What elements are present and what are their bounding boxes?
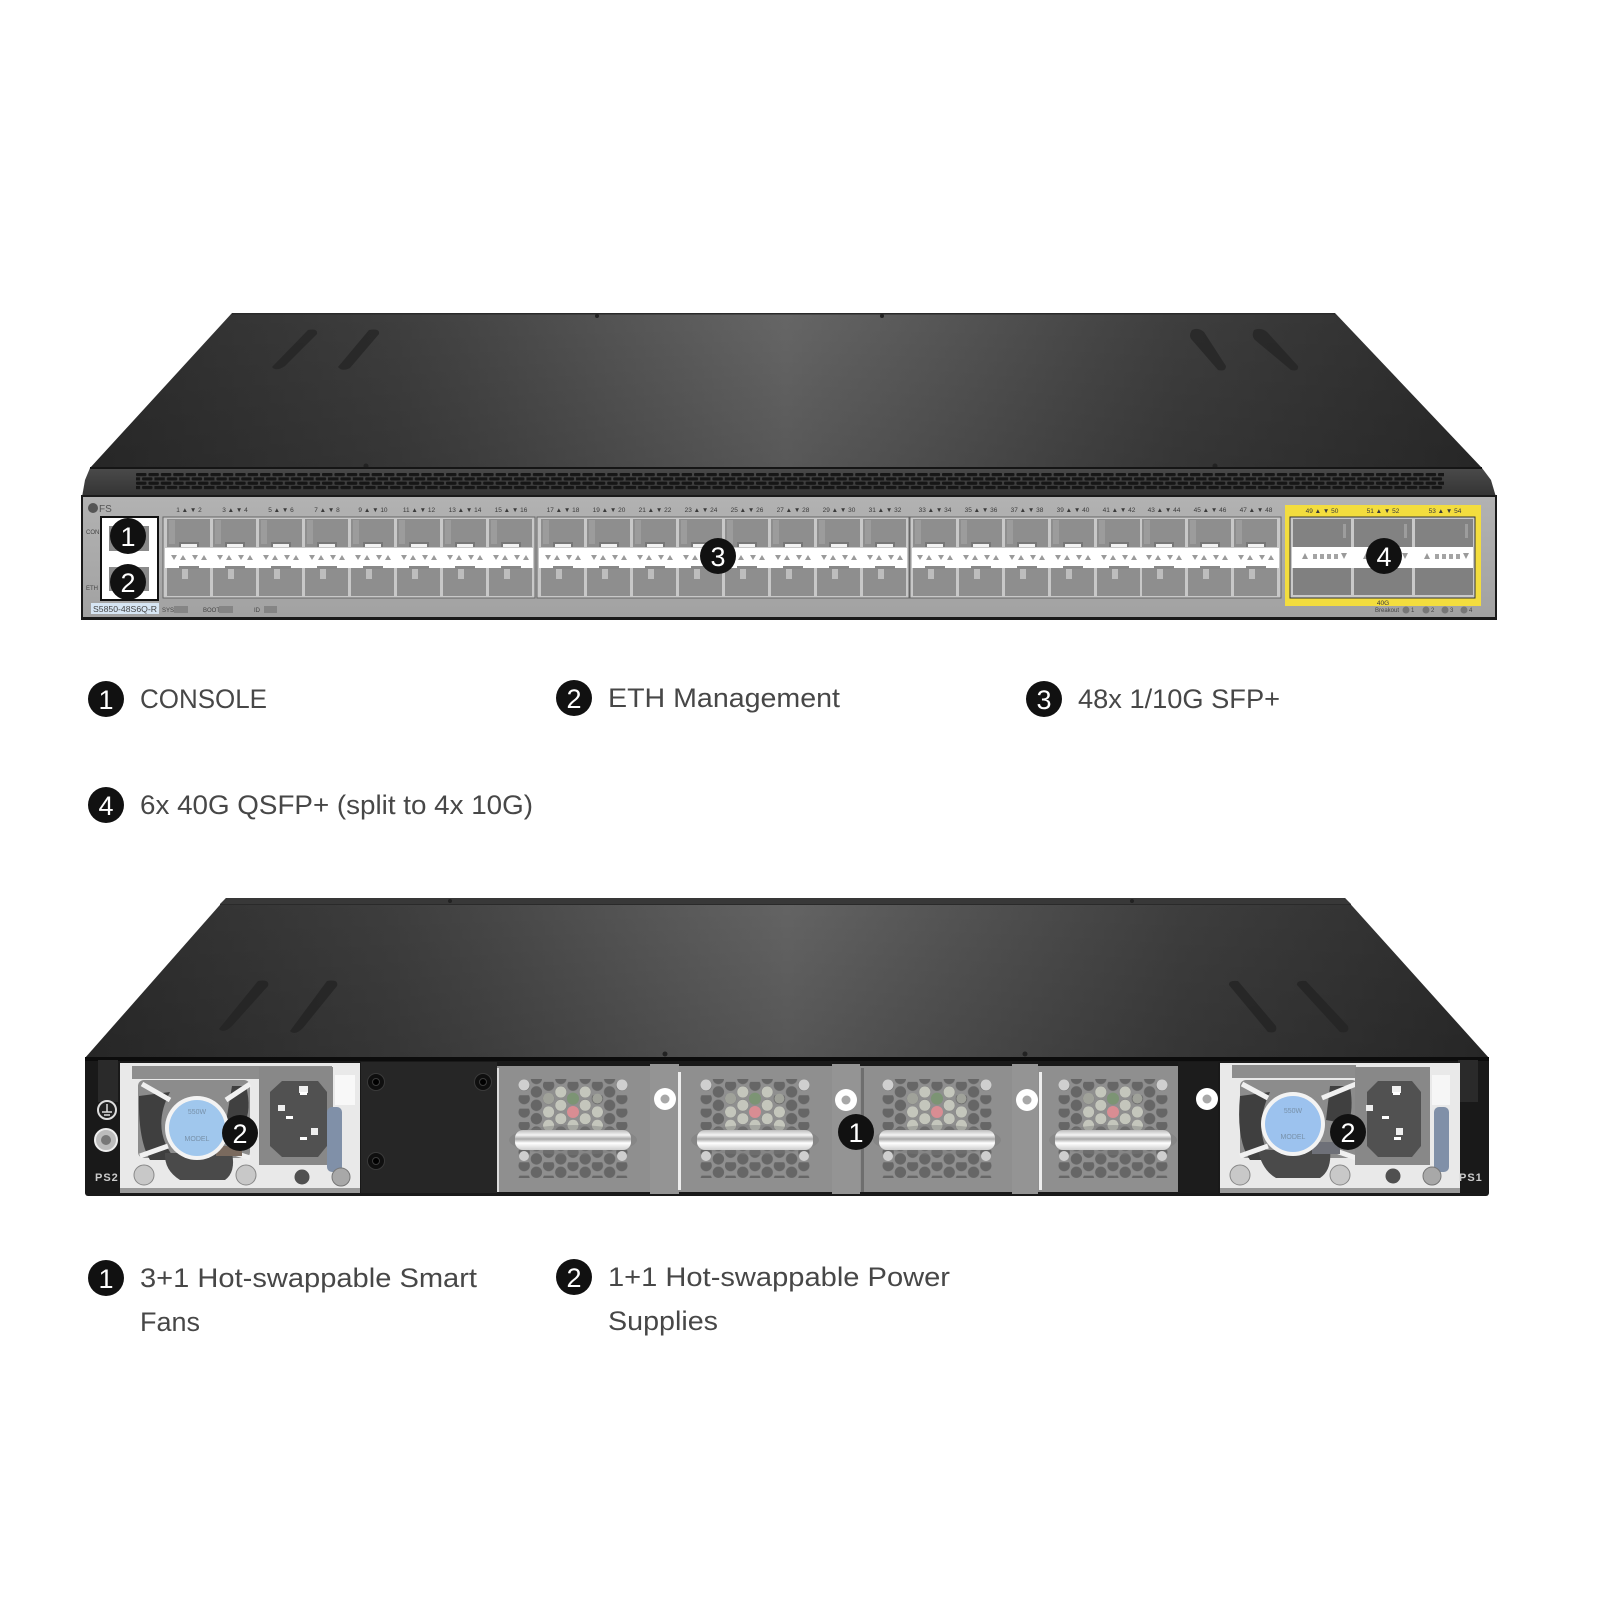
- model label and status LEDs: ID: [254, 608, 261, 614]
- legend item 4 QSFP+: 4: [98, 791, 114, 821]
- legend item 1 CONSOLE: [88, 681, 267, 717]
- power supply 2 (left): 550W: [188, 1109, 207, 1116]
- legend item 2 power supplies: 2: [566, 1263, 582, 1293]
- ground symbols: [95, 1101, 117, 1151]
- panel: front view of switch: [81, 313, 1497, 620]
- breakout LED legend: Breakout: [1375, 608, 1399, 614]
- SFP+ port number labels: 7 ▲ ▼ 8: [314, 507, 340, 514]
- power supply 2 (left): MODEL: [185, 1136, 210, 1143]
- SFP+ port number labels: [176, 507, 1273, 514]
- QSFP+ ports with yellow highlight: 40G: [1377, 600, 1389, 607]
- legend: front ports: [88, 680, 1280, 823]
- callout 2: left power supply: 2: [232, 1119, 248, 1149]
- legend item 2 power supplies: [556, 1259, 950, 1336]
- legend item 1 smart fans: 3+1 Hot-swappable Smart: [140, 1263, 478, 1293]
- power supply 1 (right): [1220, 1063, 1460, 1193]
- callout 1: console: 1: [120, 522, 136, 552]
- legend item 1 smart fans: Fans: [140, 1307, 200, 1337]
- QSFP+ ports with yellow highlight: 49 ▲ ▼ 50: [1306, 508, 1339, 515]
- model label and status LEDs: [91, 603, 277, 614]
- model label and status LEDs: BOOT: [203, 608, 220, 614]
- SFP+ ports group 1: [163, 517, 535, 598]
- SFP+ port number labels: 3 ▲ ▼ 4: [222, 507, 248, 514]
- QSFP+ ports with yellow highlight: 53 ▲ ▼ 54: [1429, 508, 1462, 515]
- callout 3: SFP+: [700, 538, 736, 574]
- SFP+ port number labels: 43 ▲ ▼ 44: [1148, 507, 1181, 514]
- callout 1: fans: 1: [848, 1118, 864, 1148]
- SFP+ port number labels: 41 ▲ ▼ 42: [1103, 507, 1136, 514]
- SFP+ port number labels: 27 ▲ ▼ 28: [777, 507, 810, 514]
- SFP+ ports group 2: [537, 517, 909, 598]
- SFP+ port number labels: 31 ▲ ▼ 32: [869, 507, 902, 514]
- SFP+ port number labels: 19 ▲ ▼ 20: [593, 507, 626, 514]
- front bezel with vent holes: [82, 467, 1496, 497]
- callout 1: fans: [838, 1114, 874, 1150]
- QSFP+ ports with yellow highlight: 51 ▲ ▼ 52: [1367, 508, 1400, 515]
- legend item 2 ETH Management: 2: [566, 684, 582, 714]
- callout 1: console: [110, 518, 146, 554]
- callout 2: right power supply: 2: [1340, 1118, 1356, 1148]
- breakout LED legend: 2: [1431, 608, 1435, 614]
- FS logo: FS: [99, 504, 112, 515]
- legend item 3 SFP+: 3: [1036, 685, 1052, 715]
- SFP+ port number labels: 9 ▲ ▼ 10: [358, 507, 388, 514]
- fan modules: [497, 1064, 1178, 1194]
- legend item 2 ETH Management: [556, 680, 841, 716]
- panel: rear view of switch: [85, 898, 1489, 1196]
- legend item 1 CONSOLE: CONSOLE: [140, 684, 267, 714]
- legend item 2 ETH Management: ETH Management: [608, 683, 841, 713]
- legend item 4 QSFP+: 6x 40G QSFP+ (split to 4x 10G): [140, 790, 533, 820]
- power supply 2 (left): [120, 1063, 360, 1193]
- SFP+ port number labels: 15 ▲ ▼ 16: [495, 507, 528, 514]
- QSFP+ ports with yellow highlight: [1285, 505, 1481, 607]
- SFP+ port number labels: 11 ▲ ▼ 12: [403, 507, 436, 514]
- chassis top lid (front): [90, 313, 1482, 468]
- legend item 1 CONSOLE: 1: [98, 685, 114, 715]
- SFP+ ports group 3: [910, 517, 1281, 598]
- callout 2: ETH: 2: [120, 568, 136, 598]
- model label and status LEDs: S5850-48S6Q-R: [93, 604, 157, 614]
- SFP+ port number labels: 13 ▲ ▼ 14: [449, 507, 482, 514]
- console and management port box: CON: [86, 530, 99, 536]
- SFP+ port number labels: 25 ▲ ▼ 26: [731, 507, 764, 514]
- callout 4: QSFP+: 4: [1376, 542, 1392, 572]
- callout 3: SFP+: 3: [710, 542, 726, 572]
- breakout LED legend: 4: [1469, 608, 1473, 614]
- SFP+ port number labels: 37 ▲ ▼ 38: [1011, 507, 1044, 514]
- SFP+ port number labels: 29 ▲ ▼ 30: [823, 507, 856, 514]
- callout 2: right power supply: [1330, 1114, 1366, 1150]
- legend item 2 power supplies: Supplies: [608, 1306, 718, 1336]
- PS2 label: PS2: [95, 1172, 119, 1184]
- FS logo: [88, 503, 112, 515]
- front panel face: [81, 495, 1497, 620]
- legend item 1 smart fans: 1: [98, 1264, 114, 1294]
- console and management port box: ETH: [86, 586, 98, 592]
- SFP+ port number labels: 47 ▲ ▼ 48: [1240, 507, 1273, 514]
- legend item 1 smart fans: [88, 1260, 478, 1337]
- SFP+ port number labels: 45 ▲ ▼ 46: [1194, 507, 1227, 514]
- breakout LED legend: 1: [1411, 608, 1415, 614]
- right fan tray plate: [1178, 1062, 1218, 1193]
- SFP+ port number labels: 23 ▲ ▼ 24: [685, 507, 718, 514]
- chassis top lid (rear): [85, 898, 1489, 1058]
- legend item 2 power supplies: 1+1 Hot-swappable Power: [608, 1262, 950, 1292]
- SFP+ port number labels: 35 ▲ ▼ 36: [965, 507, 998, 514]
- callout 2: left power supply: [222, 1115, 258, 1151]
- console and management port box: [86, 517, 158, 600]
- rear panel body: [85, 1057, 1489, 1196]
- callout 4: QSFP+: [1366, 538, 1402, 574]
- SFP+ port number labels: 21 ▲ ▼ 22: [639, 507, 672, 514]
- power supply 1 (right): 550W: [1284, 1108, 1303, 1115]
- SFP+ port number labels: 1 ▲ ▼ 2: [176, 507, 202, 514]
- breakout LED legend: [1375, 606, 1473, 614]
- model label and status LEDs: SYS: [162, 608, 174, 614]
- breakout LED legend: 3: [1450, 608, 1454, 614]
- SFP+ port number labels: 39 ▲ ▼ 40: [1057, 507, 1090, 514]
- SFP+ port number labels: 33 ▲ ▼ 34: [919, 507, 952, 514]
- callout 2: ETH: [110, 564, 146, 600]
- SFP+ port number labels: 5 ▲ ▼ 6: [268, 507, 294, 514]
- SFP+ port number labels: 17 ▲ ▼ 18: [547, 507, 580, 514]
- power supply 1 (right): MODEL: [1281, 1134, 1306, 1141]
- blank slot plate with screws: [361, 1062, 497, 1193]
- legend item 3 SFP+: 48x 1/10G SFP+: [1078, 684, 1280, 714]
- legend item 3 SFP+: [1026, 681, 1280, 717]
- PS1 label: PS1: [1459, 1172, 1483, 1184]
- legend: rear components: [88, 1259, 950, 1337]
